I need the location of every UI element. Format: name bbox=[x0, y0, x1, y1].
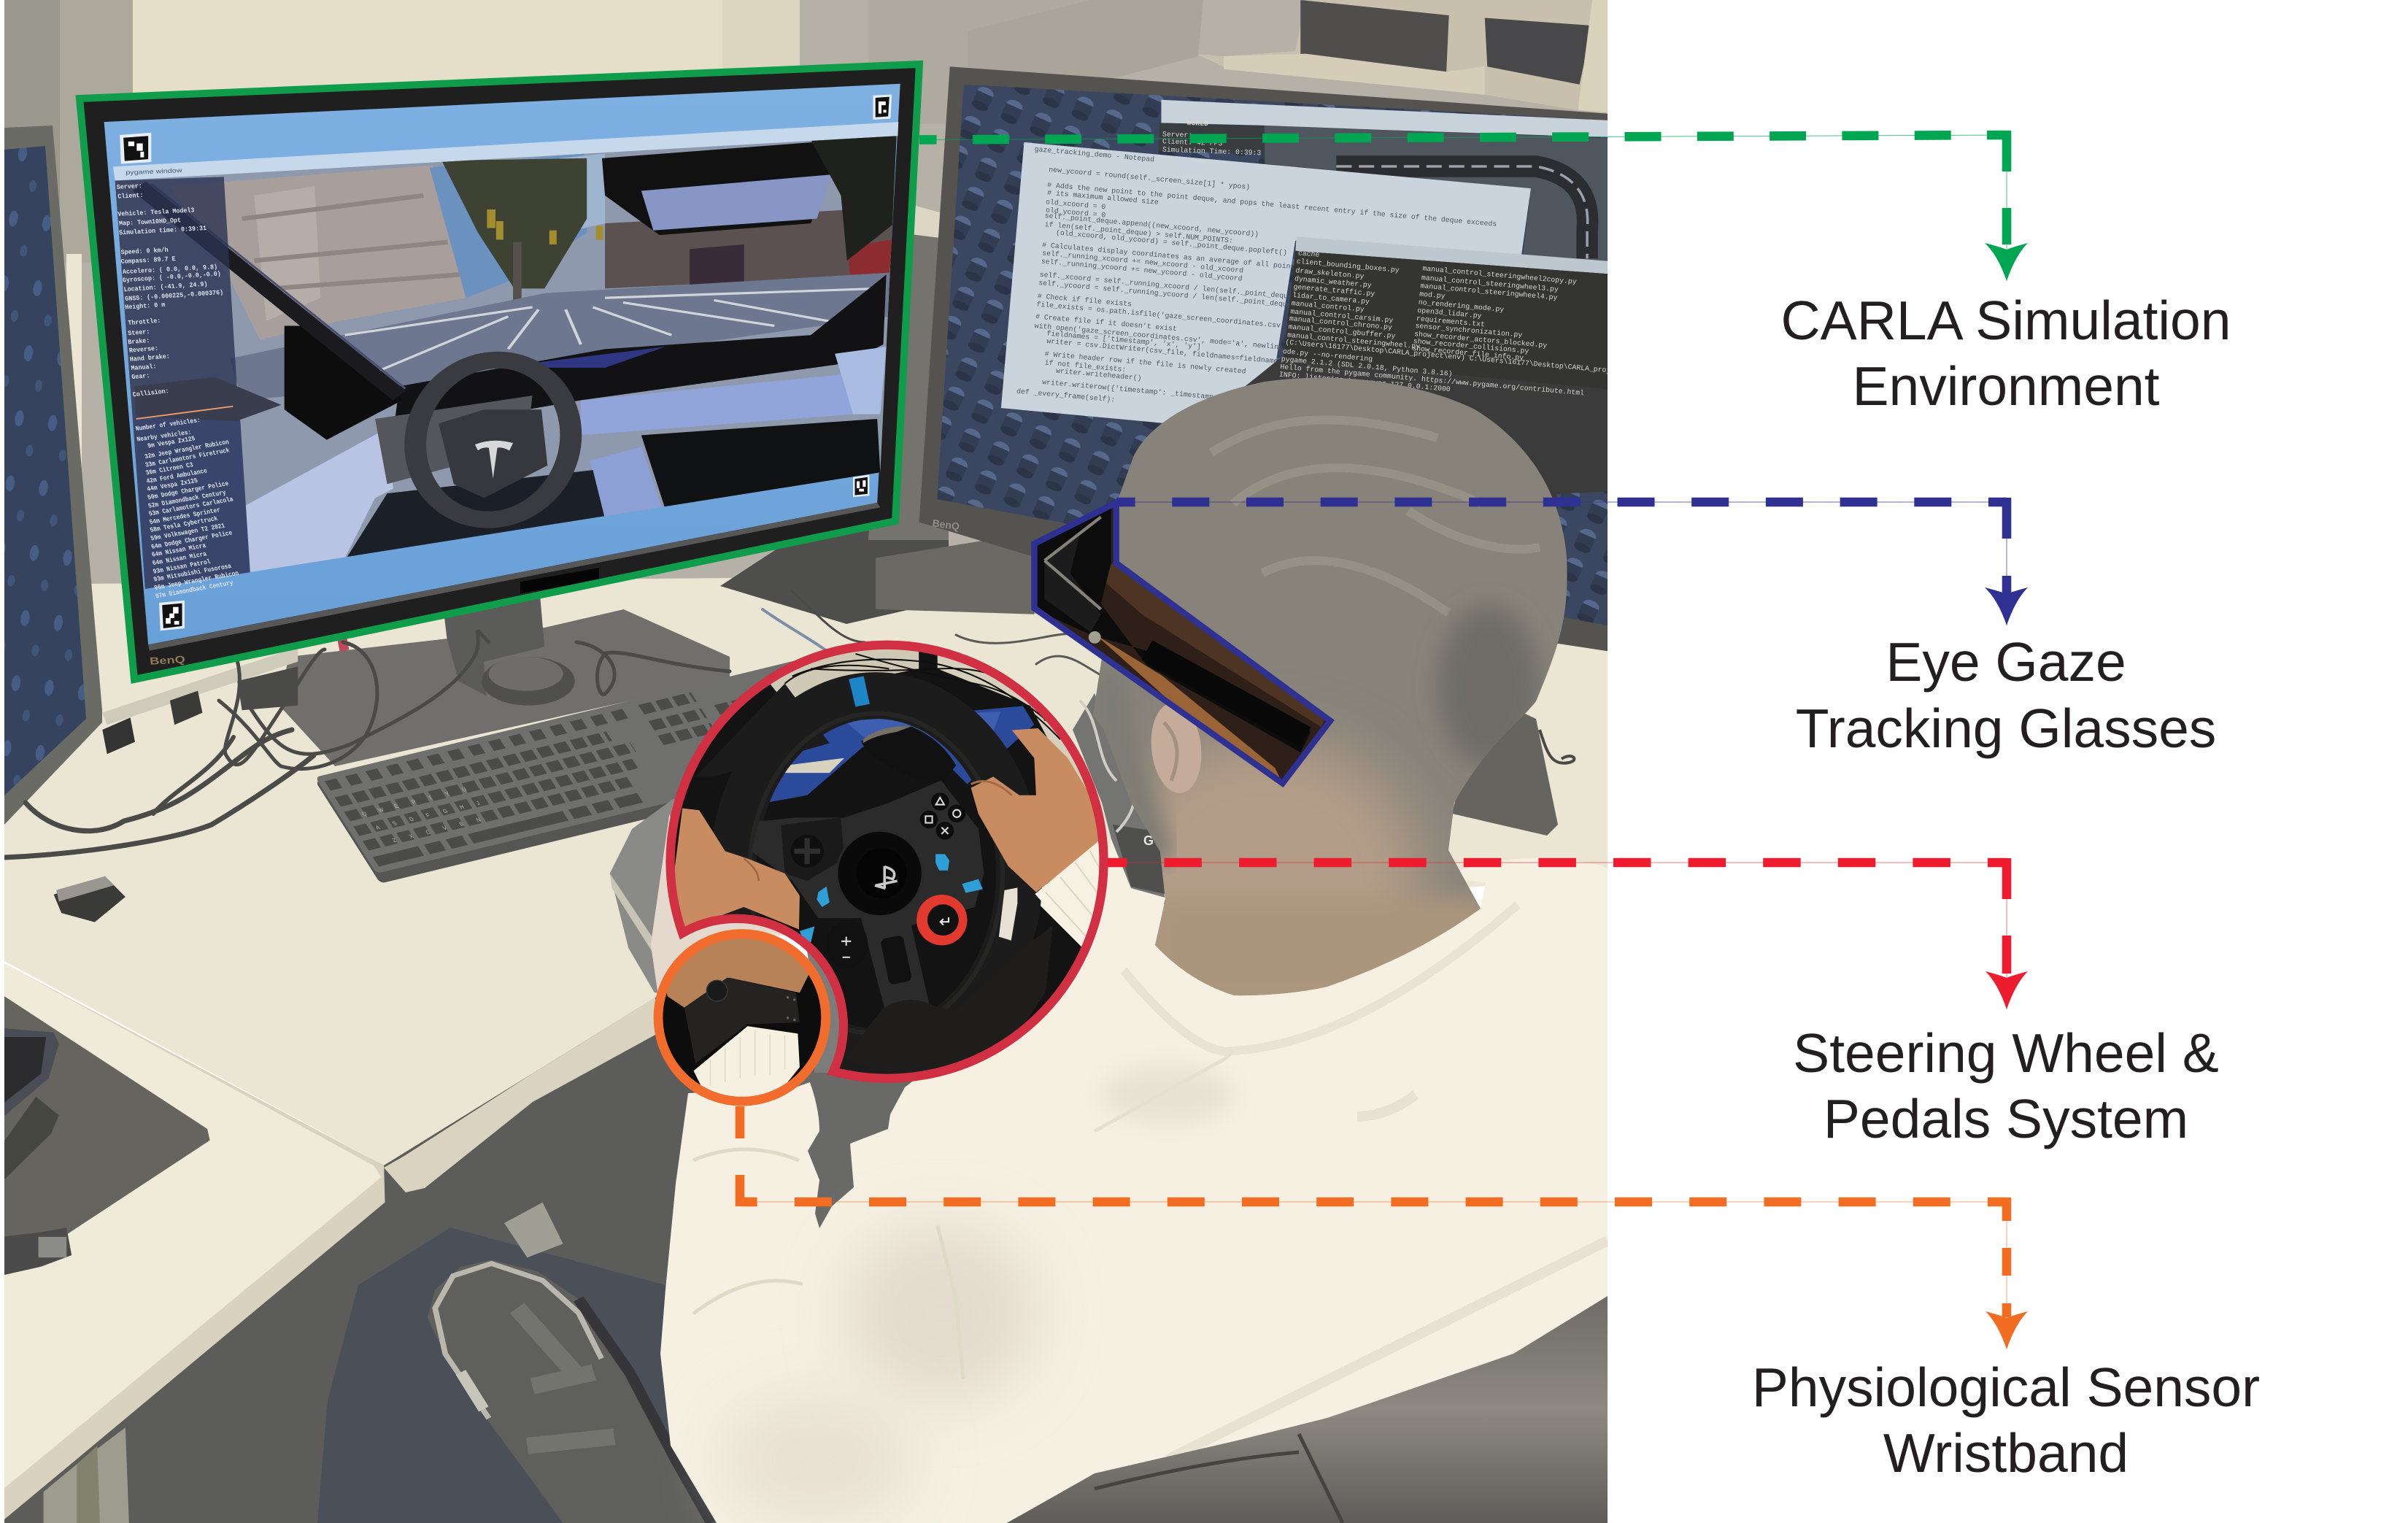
HUD text: 64m Nissan Micra bbox=[151, 542, 207, 559]
code editor window: self._running_xcoord += new_xcoord - old_xcoord bbox=[1042, 249, 1244, 274]
stand ring bbox=[482, 657, 575, 706]
code editor window: if len(self._point_deque) > self.NUM_POINTS: bbox=[1044, 220, 1233, 245]
HUD text: Height: 0 m bbox=[125, 301, 166, 312]
connector: steering wheel bbox=[1108, 858, 2028, 1009]
power strip and sockets bbox=[102, 647, 298, 725]
keyboard: N bbox=[475, 817, 482, 823]
dash light panel bbox=[581, 374, 853, 435]
HUD text: 64m Dodge Charger Police bbox=[150, 529, 234, 551]
HUD text: 93m Nissan Patrol bbox=[152, 558, 212, 576]
keyboard: G bbox=[441, 808, 449, 814]
jeans and shoe bbox=[317, 1203, 717, 1523]
terminal window: Hello from the pygame community. https://www.pygame.org/contribute.html bbox=[1280, 363, 1584, 398]
HUD panel bbox=[115, 177, 250, 591]
top marker stripe bbox=[849, 676, 870, 706]
rear view mirror bbox=[602, 139, 847, 235]
spokes and hub bbox=[752, 780, 984, 1019]
terminal window: manual_control_chrono.py bbox=[1289, 315, 1392, 331]
ear bbox=[1147, 701, 1205, 795]
code editor window: file_exists = os.path.isfile('gaze_screen_coordinates.csv') bbox=[1036, 301, 1289, 331]
mouse pad bbox=[766, 706, 1034, 803]
simulator monitor bbox=[80, 64, 919, 679]
arrowhead: simulation bbox=[1985, 243, 2028, 281]
HUD text: Brake: bbox=[128, 337, 150, 346]
CARLA no-rendering window: Simulation Time: 0:39:3 bbox=[1162, 146, 1262, 157]
phone bbox=[4, 1028, 58, 1116]
wheel background bbox=[658, 635, 1124, 1093]
HUD text: Location: (-41.9, 24.9) bbox=[123, 280, 208, 293]
beard shading bbox=[1105, 671, 1160, 861]
HUD text: 9m Vespa Zx125 bbox=[147, 435, 196, 450]
keyboard: C bbox=[425, 829, 432, 836]
shoe bbox=[428, 1260, 711, 1523]
HUD text: Throttle: bbox=[128, 317, 161, 327]
code editor window: # Calculates display coordinates as an average of all points in the deque bbox=[1042, 241, 1355, 277]
dash dark lower bbox=[641, 419, 880, 509]
label: Physiological Sensor Wristband: Wristband bbox=[1883, 1422, 2129, 1484]
wheel base pedestal bbox=[610, 799, 850, 1100]
code editor window: (old_xcoord, old_ycoord) = self._point_deque.popleft() bbox=[1056, 228, 1287, 257]
washed hand around the wrist bbox=[651, 814, 803, 996]
HUD text: Hand brake: bbox=[129, 352, 170, 363]
icon: PlayStation logo bbox=[875, 866, 898, 888]
code editor window: # Adds the new point to the point deque, and pops the least recent entry if the size of the deque exceeds bbox=[1047, 181, 1497, 228]
HUD text: Nearby vehicles: bbox=[136, 428, 192, 444]
main desk top bbox=[4, 254, 1608, 1165]
code editor window: # Create file if it doesn't exist bbox=[1035, 312, 1177, 333]
keyboard: S bbox=[391, 820, 398, 827]
photo of the driving simulator setup bbox=[0, 0, 1667, 1523]
connector: simulation environment bbox=[919, 131, 2028, 281]
HUD text: Gear: bbox=[131, 372, 150, 381]
skin of the neck bbox=[1102, 737, 1423, 1029]
terminal window: no_rendering_mode.py bbox=[1418, 298, 1505, 314]
HUD text: 53m Carlamotors Carlacola bbox=[148, 496, 234, 518]
keyboard in wheel bbox=[695, 684, 830, 776]
table leg bbox=[44, 1427, 129, 1523]
cuff bbox=[694, 1026, 800, 1104]
keyboard: R bbox=[410, 798, 418, 805]
HUD text: 50m Dodge Charger Police bbox=[147, 480, 230, 501]
terminal window: lidar_to_camera.py bbox=[1292, 291, 1370, 306]
terminal window: sensor_synchronization.py bbox=[1415, 322, 1523, 339]
right hand bbox=[971, 728, 1103, 892]
keyboard: Z bbox=[391, 837, 398, 844]
terminal window: manual_control_steeringwheel4.py bbox=[1420, 282, 1558, 302]
terminal window: requirements.txt bbox=[1416, 315, 1485, 328]
HUD text bbox=[116, 182, 240, 601]
right monitor stand block bbox=[720, 525, 949, 624]
HUD text: Manual: bbox=[131, 363, 157, 372]
arrowhead: wristband bbox=[1986, 1311, 2028, 1349]
code editor window: self._xcoord = self._running_xcoord / len(self._point_deque) bbox=[1039, 271, 1297, 301]
blue buttons bbox=[935, 854, 949, 871]
grey gap between arm and body bbox=[795, 1073, 919, 1241]
d-pad bbox=[791, 835, 824, 868]
code editor window: gaze_tracking_demo - Notepad bbox=[1034, 145, 1155, 163]
wires bbox=[785, 654, 1075, 751]
code editor window: writer.writeheader() bbox=[1056, 367, 1142, 382]
chair back bbox=[1007, 1296, 1608, 1523]
watch strap bbox=[0, 1227, 72, 1276]
head and neck bbox=[1080, 365, 1591, 1029]
terminal window: show_recorder_file_info.py bbox=[1412, 344, 1524, 362]
floor under the desk bbox=[4, 971, 1022, 1523]
keyboard: B bbox=[458, 821, 465, 828]
background cubicles bbox=[1109, 0, 1608, 112]
traffic lights bbox=[487, 209, 603, 244]
code editor window: self._point_deque.append((new_xcoord, new_ycoord)) bbox=[1044, 212, 1259, 239]
bottom bezel shine and logo bbox=[148, 503, 880, 651]
HUD text: 52m Diamondback Century bbox=[147, 489, 227, 510]
driving scene bbox=[109, 131, 908, 595]
desk front edge bbox=[384, 998, 655, 1192]
cable tangle and device left of the neck: G bbox=[1143, 833, 1154, 848]
HUD text: 32m Jeep Wrangler Rubicon bbox=[144, 439, 230, 460]
HUD text: Compass: 89.7 E bbox=[120, 255, 176, 266]
terminal window: cache bbox=[1297, 249, 1320, 259]
right monitor second stand bbox=[1452, 693, 1558, 836]
code editor window: old_ycoord = 0 bbox=[1046, 206, 1106, 220]
terminal window: ode.py --no-rendering bbox=[1282, 347, 1373, 363]
terminal window: pygame 2.1.2 (SDL 2.0.18, Python 3.8.16) bbox=[1281, 355, 1453, 378]
terminal window: manual_control_steeringwheel2copy.py bbox=[1422, 264, 1577, 286]
terminal window: manual_control.py bbox=[1291, 299, 1365, 314]
code editor window: old_xcoord = 0 bbox=[1046, 198, 1106, 211]
sweater soft shading bbox=[846, 1226, 1036, 1401]
dashboard bbox=[393, 274, 887, 433]
keyboard: F bbox=[425, 812, 432, 819]
arrowhead: wheel bbox=[1986, 971, 2028, 1009]
eye gaze glasses highlight bbox=[1029, 496, 1336, 788]
simulator screen bbox=[104, 84, 908, 667]
terminal window: show_recorder_collisions.py bbox=[1413, 337, 1529, 355]
keyboard: A bbox=[374, 824, 382, 831]
terminal window: (C:\Users\16177\Desktop\CARLA_project\env) C:\Users\16177\Desktop\CARLA_project\PythonAPI bbox=[1285, 338, 1667, 379]
code editor window: new_ycoord = round(self._screen_size[1] * ypos) bbox=[1049, 166, 1251, 191]
white part bbox=[999, 887, 1017, 941]
simulator screen: BenQ bbox=[150, 654, 185, 667]
glasses outline bbox=[1034, 503, 1330, 783]
small device bbox=[54, 876, 126, 922]
road bbox=[230, 272, 895, 401]
dark tree top right bbox=[811, 136, 897, 261]
wheel rim bbox=[733, 695, 1019, 1052]
arrowhead: glasses bbox=[1985, 587, 2028, 625]
green monitor outline bbox=[80, 64, 919, 679]
face buttons bbox=[920, 793, 965, 840]
monitor brand: BenQ bbox=[932, 517, 960, 532]
marker bottom right bbox=[853, 475, 869, 497]
keyboard: X bbox=[408, 833, 414, 840]
code editor window bbox=[1001, 142, 1531, 433]
HUD text: Speed: 0 km/h bbox=[120, 247, 169, 256]
keyboard: Y bbox=[444, 790, 451, 797]
chair seam bbox=[1095, 1434, 1343, 1523]
window title bar bbox=[113, 122, 898, 180]
keyboard bbox=[313, 657, 879, 884]
connector: wristband bbox=[740, 1106, 2028, 1349]
gap grey beside the wrist bbox=[803, 929, 850, 1100]
terminal window: manual_control_carsim.py bbox=[1290, 307, 1394, 325]
right monitor bbox=[876, 66, 1667, 651]
HUD text: 64m Nissan Micra bbox=[152, 550, 208, 567]
left monitor bbox=[4, 126, 102, 825]
keyboard: Q bbox=[360, 811, 368, 817]
icon: Tesla logo bbox=[475, 441, 513, 479]
code editor window: def _every_frame(self): bbox=[1016, 388, 1116, 404]
connector: eye gaze glasses bbox=[1116, 498, 2028, 625]
far buildings bbox=[605, 207, 895, 288]
code editor window: if not file_exists: bbox=[1044, 358, 1127, 374]
terminal window: show_recorder_actors_blocked.py bbox=[1414, 330, 1548, 350]
steering wheel in scene bbox=[405, 354, 581, 525]
monitor stand plate and keyboard area bbox=[102, 593, 730, 766]
HUD text: 96m Jeep Wrangler Rubicon bbox=[153, 569, 240, 592]
terminal window: INFO: listening to server 127.0.0.1:2000 bbox=[1279, 371, 1451, 393]
code editor window: self._ycoord = self._running_ycoord / len(self._point_deque) bbox=[1038, 279, 1296, 309]
wheel outline bbox=[671, 645, 1103, 1079]
HUD text: 33m Carlamotors Firetruck bbox=[144, 447, 231, 469]
HUD text: 97m Diamondback Century bbox=[155, 579, 234, 601]
tree bbox=[441, 158, 587, 288]
keyboard: E bbox=[393, 803, 400, 809]
HUD text: 36m Citroen C3 bbox=[144, 461, 194, 477]
monitor frame bbox=[80, 64, 919, 679]
code editor window: writer.writerow({'timestamp': _timestamp, 'x': x}) bbox=[1042, 378, 1257, 405]
code editor window: self._running_ycoord += new_ycoord - old_ycoord bbox=[1041, 258, 1243, 283]
HUD text: Number of vehicles: bbox=[135, 417, 201, 433]
band bbox=[684, 978, 800, 1063]
HUD text: 93m Mitsubishi Fusorosa bbox=[153, 563, 232, 584]
mouse bbox=[861, 726, 956, 784]
sweater collar shading bbox=[1124, 905, 1518, 1052]
keyboard: V bbox=[441, 825, 449, 831]
office wall and pillars bbox=[4, 0, 1608, 657]
keyboard: J bbox=[475, 800, 482, 806]
red dial bbox=[916, 895, 968, 945]
terminal window: manual_control_steeringwheel.py bbox=[1287, 331, 1421, 350]
keyboard: H bbox=[458, 803, 466, 811]
keyboard: U bbox=[460, 786, 468, 793]
label: Steering Wheel and Pedals System: Steering Wheel & bbox=[1793, 1022, 2219, 1084]
terminal window: open3d_lidar.py bbox=[1417, 306, 1482, 320]
HUD text: Collision: bbox=[132, 388, 170, 398]
A pillar bbox=[285, 325, 402, 440]
pedal bbox=[504, 1203, 563, 1257]
CARLA no-rendering window: Server: bbox=[1162, 131, 1192, 139]
marker top left bbox=[120, 133, 151, 164]
orange circle outline bbox=[658, 934, 826, 1101]
HUD text: Simulation time: 0:39:31 bbox=[119, 225, 207, 237]
CARLA no-rendering window: WORLD bbox=[1186, 119, 1208, 128]
fiducial markers bbox=[120, 94, 892, 631]
terminal window: manual_control_gbuffer.py bbox=[1288, 323, 1396, 340]
HUD text: 58m Tesla Cybertruck bbox=[149, 514, 219, 534]
wristband highlight bbox=[655, 933, 830, 1104]
white sweater bbox=[660, 839, 1608, 1523]
HUD text: 42m Ford Ambulance bbox=[145, 467, 208, 485]
label: CARLA Simulation Environment: Environment bbox=[1852, 355, 2160, 417]
HUD text: 59m Volkswagen T2 2021 bbox=[150, 522, 226, 543]
label: CARLA Simulation Environment: CARLA Simulation bbox=[1781, 290, 2231, 351]
monitor stand neck bbox=[444, 593, 544, 695]
centre hub bbox=[837, 830, 922, 917]
lower wheel spoke bbox=[844, 925, 1053, 1079]
keyboard: W bbox=[377, 806, 386, 814]
keyboard: D bbox=[408, 816, 415, 822]
code editor window: # Check if file exists bbox=[1037, 292, 1132, 309]
interior panels bbox=[242, 428, 393, 587]
label: Steering Wheel and Pedals System: Pedals System bbox=[1824, 1088, 2188, 1149]
terminal window: client_bounding_boxes.py bbox=[1296, 258, 1400, 274]
terminal window: dynamic_weather.py bbox=[1294, 274, 1372, 290]
HUD text: 44m Vespa Zx125 bbox=[146, 477, 198, 493]
keyboard: T bbox=[427, 795, 434, 801]
code editor window: fieldnames = ['timestamp', 'x', 'y'] bbox=[1046, 330, 1201, 351]
terminal window: generate_traffic.py bbox=[1293, 283, 1375, 298]
marker top right bbox=[873, 94, 892, 120]
left hand bbox=[673, 809, 800, 929]
cable tangle and device left of the neck bbox=[1073, 693, 1165, 905]
terminal window bbox=[1183, 236, 1667, 625]
CARLA no-rendering window bbox=[1158, 100, 1608, 261]
marker bottom left bbox=[159, 601, 185, 631]
sweater cuff backdrop bbox=[1030, 836, 1116, 985]
cables on the desk bbox=[4, 591, 1118, 857]
HUD text: Server: bbox=[116, 182, 142, 191]
simulator screen: pygame window bbox=[126, 167, 182, 177]
HUD text: Steer: bbox=[128, 328, 150, 337]
HUD text: Accelero: ( 0.0, 0.0, 9.8) bbox=[123, 263, 218, 276]
hair texture bbox=[1211, 420, 1540, 613]
terminal window: draw_skeleton.py bbox=[1295, 266, 1365, 280]
cable on the desk bbox=[1540, 730, 1574, 763]
CARLA no-rendering window: Client: 42 FPS bbox=[1162, 137, 1223, 147]
HUD text: Vehicle: Tesla Model3 bbox=[117, 207, 195, 218]
black pad bbox=[4, 996, 210, 1236]
sweater cuff right bbox=[1035, 838, 1114, 948]
code editor window: writer = csv.DictWriter(csv_file, fieldnames=fieldnames) bbox=[1046, 337, 1287, 366]
label: Eye Gaze Tracking Glasses: Tracking Glasses bbox=[1796, 698, 2216, 759]
HUD text: Client: bbox=[117, 192, 144, 201]
HUD text: Map: Town10HD_Opt bbox=[119, 217, 182, 228]
code editor window: # its maximum allowed size bbox=[1047, 189, 1159, 207]
terminal window: manual_control_steeringwheel3.py bbox=[1421, 274, 1559, 293]
terminal window: mod.py bbox=[1419, 290, 1446, 301]
label: Eye Gaze Tracking Glasses: Eye Gaze bbox=[1886, 631, 2126, 693]
steering wheel highlight bbox=[658, 635, 1124, 1093]
label: Physiological Sensor Wristband: Physiological Sensor bbox=[1752, 1357, 2260, 1418]
share buttons bbox=[880, 935, 912, 985]
code editor window: with open('gaze_screen_coordinates.csv', mode='a', newline='') as csv_file: bbox=[1034, 322, 1356, 358]
side desk bbox=[0, 876, 385, 1523]
HUD text: 54m Mercedes Sprinter bbox=[148, 506, 221, 526]
HUD text: Gyroscop: ( -0.0,-0.0,-0.0) bbox=[122, 270, 221, 285]
HUD text: Reverse: bbox=[128, 344, 159, 355]
code editor window: # Write header row if the file is newly created bbox=[1044, 350, 1246, 376]
HUD text: GNSS: (-0.000225,-0.000376) bbox=[125, 289, 224, 303]
plus minus buttons bbox=[827, 920, 868, 968]
buildings bbox=[169, 165, 466, 340]
